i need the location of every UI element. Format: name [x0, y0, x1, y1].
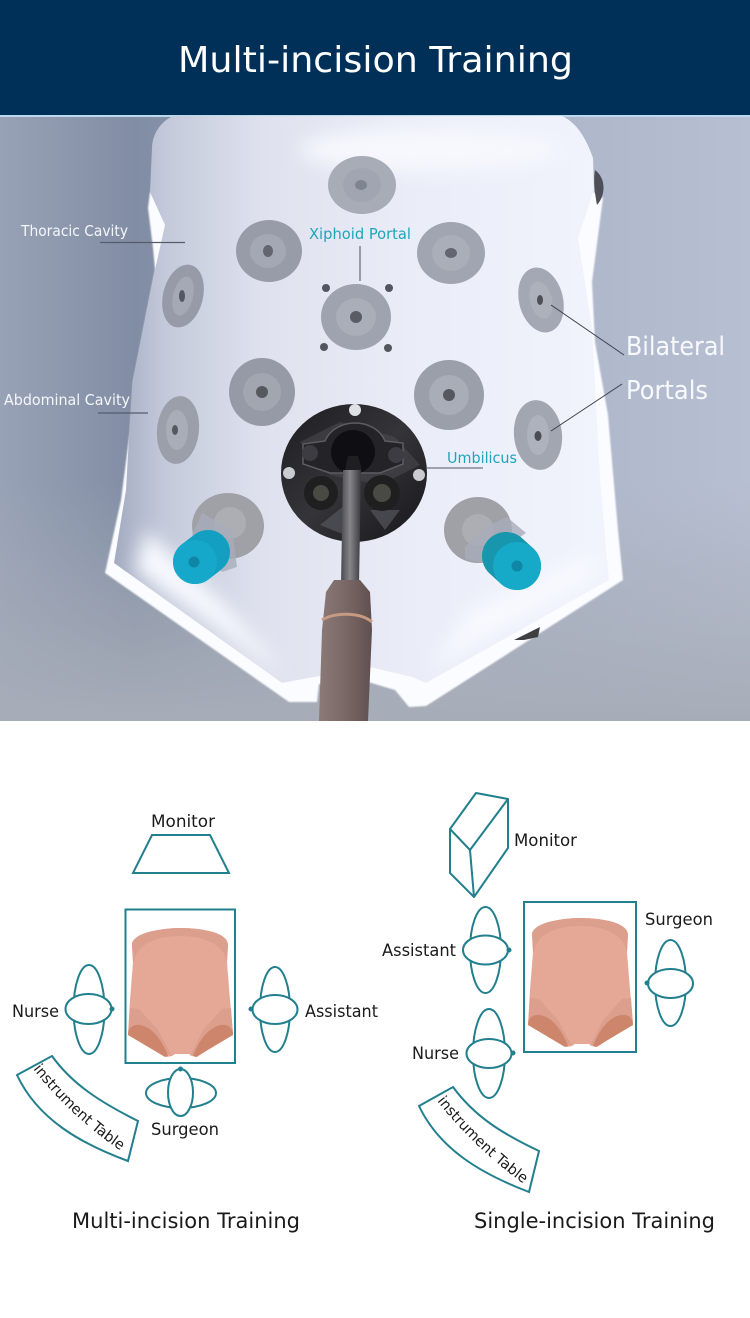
- label: xiphoid portal: Xiphoid Portal: [309, 225, 411, 243]
- person: surgeon: [146, 1068, 216, 1116]
- operating table: [126, 910, 235, 1063]
- caption: single-incision training: Single-incision Training: [474, 1209, 715, 1233]
- torso body: [114, 116, 609, 683]
- label: umbilicus: Umbilicus: [447, 449, 517, 467]
- cyan stopcock right: [465, 517, 541, 590]
- person: assistant: [463, 907, 510, 993]
- caption: multi-incision training: Multi-incision Training: [72, 1209, 300, 1233]
- panel: multi-incision layout diagram: [17, 835, 298, 1161]
- labels: multi-incision layout: instrument Table: [34, 1063, 124, 1150]
- portal: left lateral upper: [162, 264, 204, 328]
- xiphoid screw holes: [320, 284, 393, 352]
- person: surgeon: [646, 940, 693, 1026]
- label: abdominal cavity: Abdominal Cavity: [4, 391, 130, 409]
- labels: multi-incision layout: [12, 812, 378, 1150]
- portal: bottom left: [192, 493, 264, 559]
- panel: product photo: [0, 115, 750, 721]
- person: nurse: [66, 965, 114, 1054]
- panel: single-incision layout diagram: [419, 793, 693, 1192]
- person: assistant: [250, 967, 298, 1052]
- cyan stopcock left: [173, 513, 237, 584]
- torso model: [128, 928, 233, 1057]
- label: xiphoid portal: [309, 225, 411, 281]
- title: Multi-incision Training: [178, 40, 573, 81]
- labels: multi-incision layout: Surgeon: [151, 1120, 219, 1140]
- umbilicus disc: [281, 404, 427, 542]
- label: bilateral portals: Portals: [626, 376, 708, 406]
- torso model: [528, 918, 633, 1047]
- portal: left lateral lower: [156, 396, 200, 464]
- labels: single-incision layout: Nurse: [412, 1044, 459, 1064]
- portal: lower left: [229, 358, 295, 426]
- labels: single-incision layout: Monitor: [514, 831, 577, 851]
- bottom clip: [514, 627, 540, 640]
- labels: multi-incision layout: Nurse: [12, 1002, 59, 1022]
- labels: single-incision layout: Assistant: [382, 941, 456, 961]
- lower folds: [128, 528, 262, 656]
- labels: single-incision layout: instrument Table: [438, 1095, 526, 1183]
- portal: lower right: [414, 360, 484, 430]
- labels: multi-incision layout: Assistant: [305, 1002, 378, 1022]
- header banner: [0, 0, 750, 115]
- label: bilateral portals: Bilateral: [626, 332, 725, 362]
- portal: upper left: [236, 220, 302, 282]
- portal: top: [328, 156, 396, 214]
- labels: multi-incision layout: Monitor: [151, 812, 215, 832]
- labels: single-incision layout: Surgeon: [645, 910, 713, 930]
- instrument table: [419, 1087, 539, 1192]
- portal: bottom right: [444, 497, 512, 563]
- side latch: [594, 170, 604, 205]
- portal: right lateral lower: [514, 400, 562, 470]
- laparoscopic instrument: [319, 456, 372, 721]
- person: nurse: [466, 1009, 514, 1098]
- portal: upper right: [417, 222, 485, 284]
- portal: xiphoid: [321, 284, 391, 350]
- label: bilateral portals: [551, 305, 725, 431]
- label: thoracic cavity: Thoracic Cavity: [20, 222, 128, 240]
- portal: right lateral upper: [518, 268, 564, 332]
- instrument table: [17, 1056, 138, 1161]
- operating table: [524, 902, 636, 1052]
- icon: monitor box: [450, 793, 508, 897]
- icon: monitor: [133, 835, 229, 873]
- white base flange: [105, 190, 623, 707]
- labels: single-incision layout: [382, 831, 713, 1183]
